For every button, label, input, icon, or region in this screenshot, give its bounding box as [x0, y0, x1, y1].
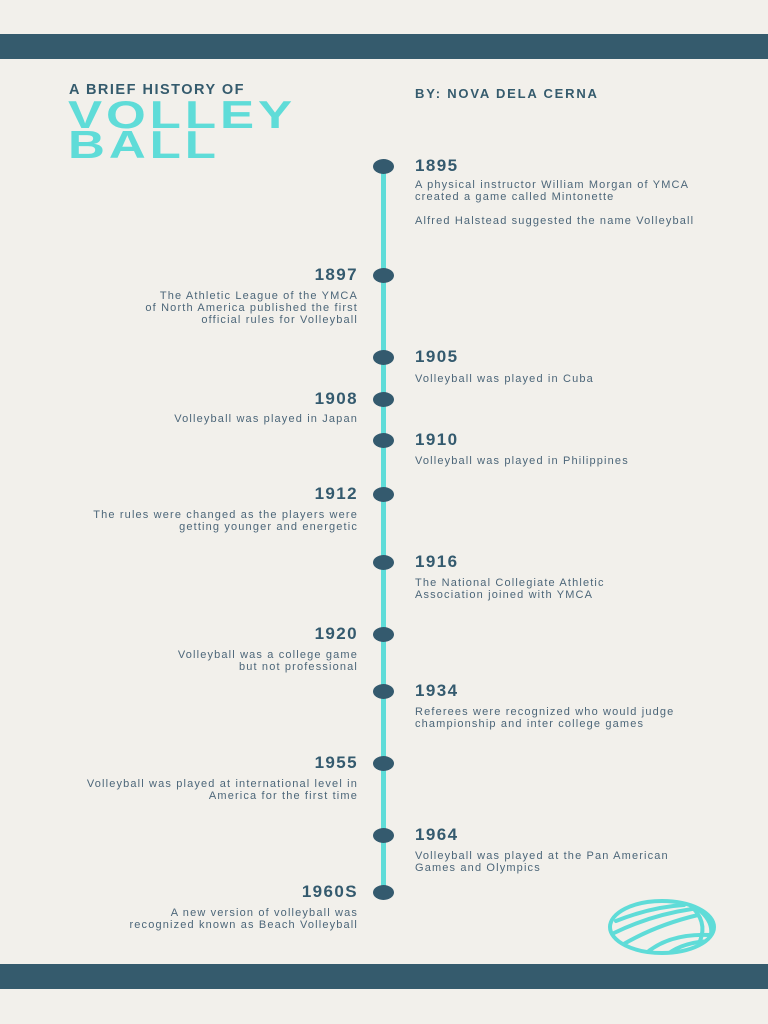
text: The Athletic League of the YMCA	[160, 290, 358, 302]
text: The rules were changed as the players were	[93, 509, 358, 521]
text: The National Collegiate Athletic	[415, 577, 605, 589]
text: 1912	[315, 484, 358, 503]
text: A new version of volleyball was	[171, 907, 358, 919]
entry 1916	[415, 552, 605, 601]
entry 1934	[415, 681, 674, 730]
entry 1905	[415, 347, 594, 385]
text: 1916	[415, 552, 458, 571]
text: 1964	[415, 825, 458, 844]
text: 1905	[415, 347, 458, 366]
text: 1910	[415, 430, 458, 449]
subtitle: A BRIEF HISTORY OF	[69, 82, 245, 98]
title: VOLLEY	[68, 94, 296, 137]
top band	[0, 34, 768, 59]
text: America for the first time	[209, 790, 358, 802]
text: of North America published the first	[145, 302, 358, 314]
entry 1897	[145, 265, 358, 326]
text: recognized known as Beach Volleyball	[129, 919, 358, 931]
text: championship and inter college games	[415, 718, 644, 730]
entry 1912	[93, 484, 358, 533]
text: Volleyball was played in Japan	[174, 413, 358, 425]
text: getting younger and energetic	[179, 521, 358, 533]
entry 1964	[415, 825, 669, 874]
text: 1908	[315, 389, 358, 408]
text: 1960S	[302, 882, 358, 901]
text: Volleyball was played in Cuba	[415, 373, 594, 385]
text: Association joined with YMCA	[415, 589, 593, 601]
title	[68, 94, 296, 167]
title: BALL	[68, 124, 220, 167]
text: Referees were recognized who would judge	[415, 706, 674, 718]
dots	[373, 159, 394, 900]
text: Volleyball was played in Philippines	[415, 455, 629, 467]
entry 1955	[87, 753, 358, 802]
text: 1955	[315, 753, 358, 772]
text: 1897	[315, 265, 358, 284]
text: Volleyball was a college game	[178, 649, 358, 661]
text: Volleyball was played at international level in	[87, 778, 358, 790]
text: 1934	[415, 681, 458, 700]
text: Alfred Halstead suggested the name Volleyball	[415, 215, 694, 227]
entry 1908	[174, 389, 358, 425]
text: but not professional	[239, 661, 358, 673]
text: 1895	[415, 156, 458, 175]
timeline line	[381, 168, 386, 893]
entry 1960S	[129, 882, 358, 931]
text: 1920	[315, 624, 358, 643]
text: Games and Olympics	[415, 862, 541, 874]
bottom band	[0, 964, 768, 989]
text: official rules for Volleyball	[201, 314, 358, 326]
text: A physical instructor William Morgan of YMCA	[415, 179, 689, 191]
text: Volleyball was played at the Pan American	[415, 850, 669, 862]
entry 1895	[415, 156, 694, 227]
entry 1910	[415, 430, 629, 467]
entry 1920	[178, 624, 358, 673]
icon: volleyball	[608, 899, 716, 955]
text: created a game called Mintonette	[415, 191, 614, 203]
author: BY: NOVA DELA CERNA	[415, 86, 599, 101]
